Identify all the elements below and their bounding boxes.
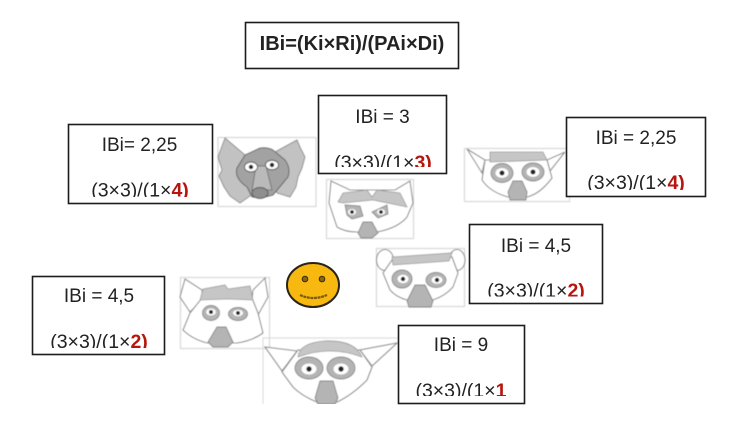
result box: IBi 3: (3×3)/(1×3): [334, 152, 432, 174]
result box: IBi 2,25 upper left: (3×3)/(1×4): [91, 180, 189, 202]
result box: IBi 2,25 upper right: IBi = 2,25: [596, 128, 676, 149]
result box: IBi 4,5 left: (3×3)/(1×2): [50, 331, 148, 353]
result box: IBi 9: (3×3)/(1×1: [415, 380, 507, 402]
formula title box: [246, 22, 458, 68]
result box: IBi 4,5 right: (3×3)/(1×2): [487, 280, 585, 302]
result box: IBi 4,5 left: [32, 276, 164, 354]
smiley face icon: [287, 263, 339, 307]
result box: IBi 2,25 upper left: IBi= 2,25: [102, 135, 177, 156]
lemur face: woolly koala-like face: [218, 138, 316, 206]
result box: IBi 2,25 upper right: [566, 118, 706, 196]
result box: IBi 9: IBi = 9: [434, 335, 488, 356]
lemur face: left: [180, 278, 270, 348]
result box: IBi 3: [318, 96, 446, 174]
result box: IBi 9: [398, 326, 524, 404]
lemur face: centre top: [326, 180, 414, 238]
result box: IBi 2,25 upper left: [68, 124, 212, 204]
result box: IBi 3: IBi = 3: [355, 107, 410, 128]
lemur face: bottom large: [263, 338, 398, 404]
lemur face: upper right: [464, 148, 570, 202]
result box: IBi 4,5 right: [470, 224, 602, 304]
formula title box: IBi=(Ki×Ri)/(PAi×Di): [260, 33, 444, 55]
lemur face: round ears, right middle: [376, 248, 465, 307]
result box: IBi 4,5 left: IBi = 4,5: [64, 286, 134, 307]
result box: IBi 2,25 upper right: (3×3)/(1×4): [587, 172, 685, 194]
result box: IBi 4,5 right: IBi = 4,5: [501, 236, 571, 257]
